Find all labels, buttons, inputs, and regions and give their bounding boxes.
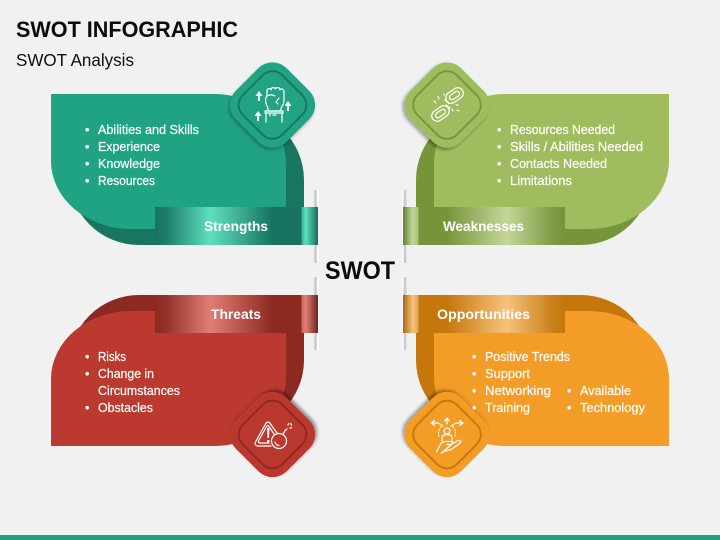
ribbon xyxy=(155,295,318,333)
bullet list: Change in xyxy=(98,367,154,381)
front shape xyxy=(434,94,669,229)
bullet list: Technology xyxy=(580,401,646,415)
bullet list: Contacts Needed xyxy=(510,157,607,171)
subtitle: SWOT Analysis xyxy=(16,50,134,70)
bullet list xyxy=(85,350,180,415)
title: SWOT INFOGRAPHIC xyxy=(16,17,238,42)
bullet list xyxy=(85,123,199,188)
center dividers xyxy=(314,190,407,350)
bullet list: Networking xyxy=(485,384,551,398)
bullet list: Limitations xyxy=(510,174,572,188)
bullet list: Positive Trends xyxy=(485,350,570,364)
bullet list xyxy=(497,123,643,188)
bullet list: • xyxy=(85,140,89,154)
bullet list: • xyxy=(497,123,501,137)
bottom bar xyxy=(0,535,720,540)
back shape xyxy=(416,295,651,430)
back shape xyxy=(69,110,304,245)
bullet list: Circumstances xyxy=(98,384,180,398)
ribbon xyxy=(403,207,565,245)
bullet list: • xyxy=(497,174,501,188)
panel: strengths xyxy=(51,54,323,245)
bullet list: • xyxy=(85,401,89,415)
bullet list: Abilities and Skills xyxy=(98,123,199,137)
back shape xyxy=(416,110,651,245)
ribbon xyxy=(403,295,565,333)
icon: broken chain xyxy=(396,54,498,156)
panel: weaknesses xyxy=(396,54,669,245)
bullet list: Resources Needed xyxy=(510,123,615,137)
bullet list: • xyxy=(472,367,476,381)
bullet list: • xyxy=(85,174,89,188)
icon: raised fist xyxy=(222,54,323,156)
ribbon label: Opportunities xyxy=(437,306,530,322)
bullet list: Obstacles xyxy=(98,401,153,415)
bullet list: • xyxy=(85,350,89,364)
bullet list xyxy=(472,350,646,415)
bullet list: Skills / Abilities Needed xyxy=(510,140,643,154)
bullet list: • xyxy=(472,401,476,415)
bullet list: • xyxy=(85,367,89,381)
ribbon label: Weaknesses xyxy=(443,218,524,234)
bullet list: • xyxy=(85,157,89,171)
back shape xyxy=(69,295,304,430)
ribbon xyxy=(155,207,318,245)
bullet list: Support xyxy=(485,367,531,381)
bullet list: • xyxy=(567,401,571,415)
bullet list: • xyxy=(85,123,89,137)
bullet list: Resources xyxy=(98,174,155,188)
icon: warning and bomb xyxy=(222,384,323,485)
bullet list: Experience xyxy=(98,140,160,154)
bullet list: • xyxy=(497,140,501,154)
center label: SWOT xyxy=(325,257,395,285)
bullet list: Training xyxy=(485,401,530,415)
bullet list: • xyxy=(472,384,476,398)
bullet list: • xyxy=(497,157,501,171)
front shape xyxy=(51,94,286,229)
bullet list: • xyxy=(472,350,476,364)
ribbon label: Strengths xyxy=(204,218,268,234)
panel: opportunities xyxy=(396,295,669,485)
front shape xyxy=(51,311,286,446)
bullet list: Available xyxy=(580,384,631,398)
icon: hand with options xyxy=(396,384,498,485)
bullet list: Knowledge xyxy=(98,157,160,171)
panel: threats xyxy=(51,295,323,485)
bullet list: Risks xyxy=(98,350,126,364)
front shape xyxy=(434,311,669,446)
ribbon label: Threats xyxy=(211,306,261,322)
bullet list: • xyxy=(567,384,571,398)
